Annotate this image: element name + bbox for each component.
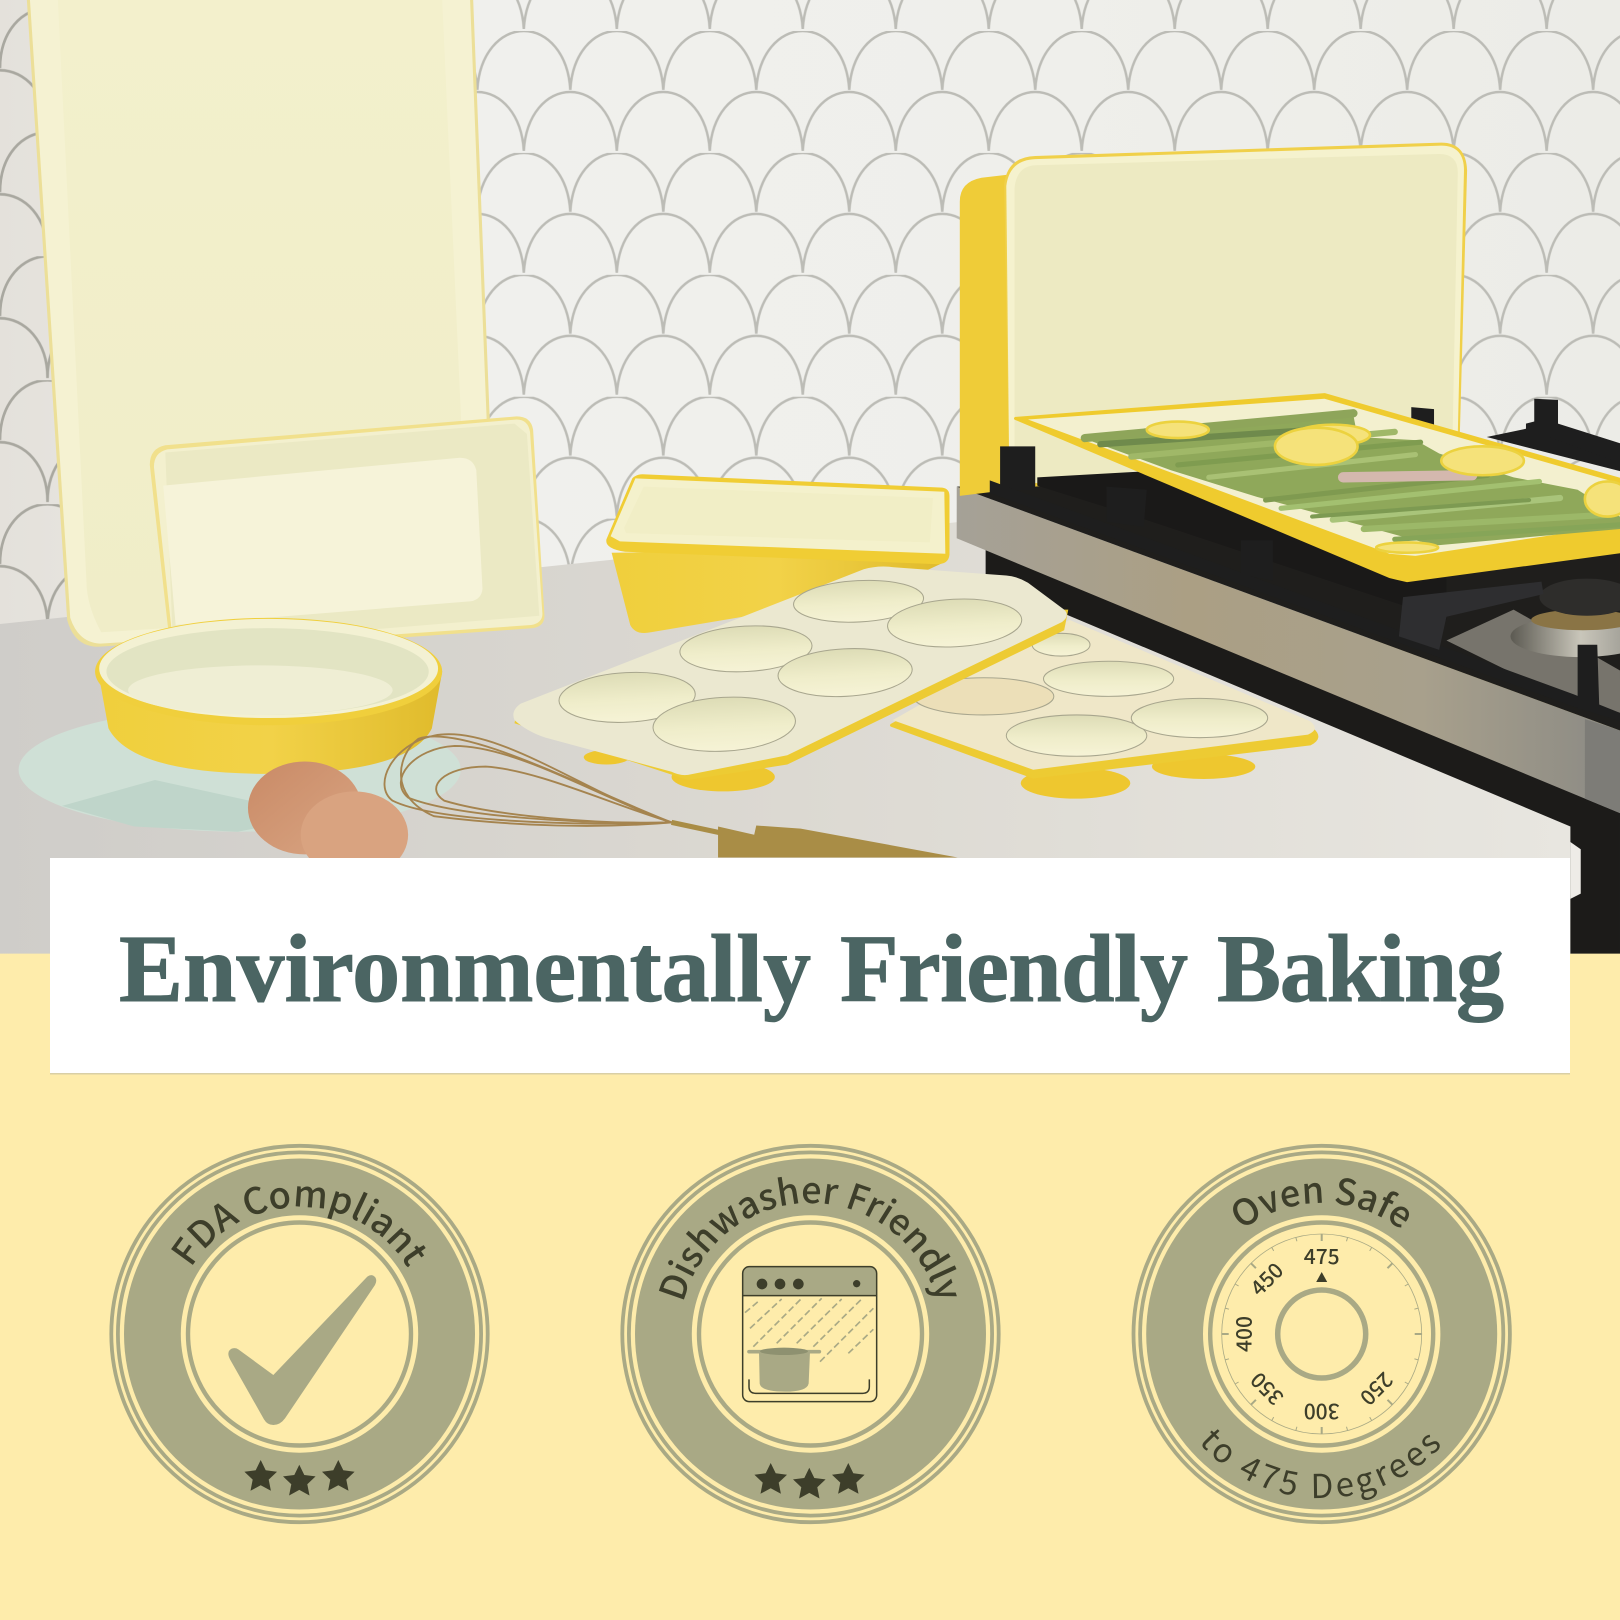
large sheet pan leaning left xyxy=(27,0,496,647)
rating stars xyxy=(754,1463,865,1498)
burner xyxy=(1510,579,1620,657)
loaf pan xyxy=(150,416,544,653)
dial numbers: 400 xyxy=(1229,1316,1259,1352)
title panel xyxy=(50,858,1570,1073)
asparagus bunch xyxy=(1083,410,1620,546)
dial numbers: 300 xyxy=(1304,1397,1340,1427)
rating stars xyxy=(244,1460,355,1496)
counter top xyxy=(0,522,1581,954)
stove front and base xyxy=(957,477,1620,954)
title xyxy=(119,915,1504,1022)
photo: bakeware in a kitchen xyxy=(0,0,1620,954)
large roasting pan xyxy=(960,143,1467,496)
badge text: Oven Safe: Oven Safe xyxy=(1233,1178,1409,1228)
badge: FDA Compliant xyxy=(109,1144,490,1524)
whisk xyxy=(384,734,720,833)
dial numbers: 450 xyxy=(1243,1256,1290,1302)
dial numbers xyxy=(1229,1241,1400,1427)
muffin tin rear xyxy=(892,620,1317,799)
square baking pan xyxy=(606,474,949,633)
dial numbers: 350 xyxy=(1243,1366,1290,1412)
badge: Oven Safe xyxy=(1132,1144,1512,1524)
title: Baking xyxy=(1217,915,1504,1022)
muffin tin front xyxy=(513,567,1068,791)
badge text: to 475 Degrees: to 475 Degrees xyxy=(1202,1429,1440,1500)
icon: oven with pot xyxy=(743,1267,877,1402)
badge text: Dishwasher Friendly: Dishwasher Friendly xyxy=(658,1176,957,1300)
icon: temperature dial xyxy=(1222,1234,1422,1434)
tiled wall xyxy=(0,0,1620,641)
eggs xyxy=(248,762,408,858)
silicone mat xyxy=(19,708,461,832)
round cake pan xyxy=(95,618,442,774)
dial numbers: 250 xyxy=(1354,1366,1400,1412)
title: Friendly xyxy=(840,915,1188,1022)
panel bottom shadow xyxy=(50,1073,1570,1074)
badge: Dishwasher Friendly xyxy=(620,1144,1001,1524)
asparagus spears xyxy=(1085,413,1620,539)
sheet pan with asparagus xyxy=(1016,395,1620,581)
lemon slices xyxy=(1147,422,1620,553)
icon: check mark xyxy=(228,1275,376,1425)
title: Environmentally xyxy=(119,915,811,1022)
stove grates xyxy=(990,399,1620,721)
dial numbers: 475 xyxy=(1304,1241,1340,1271)
whisk handle xyxy=(718,825,958,858)
badge text: FDA Compliant: FDA Compliant xyxy=(171,1186,426,1268)
